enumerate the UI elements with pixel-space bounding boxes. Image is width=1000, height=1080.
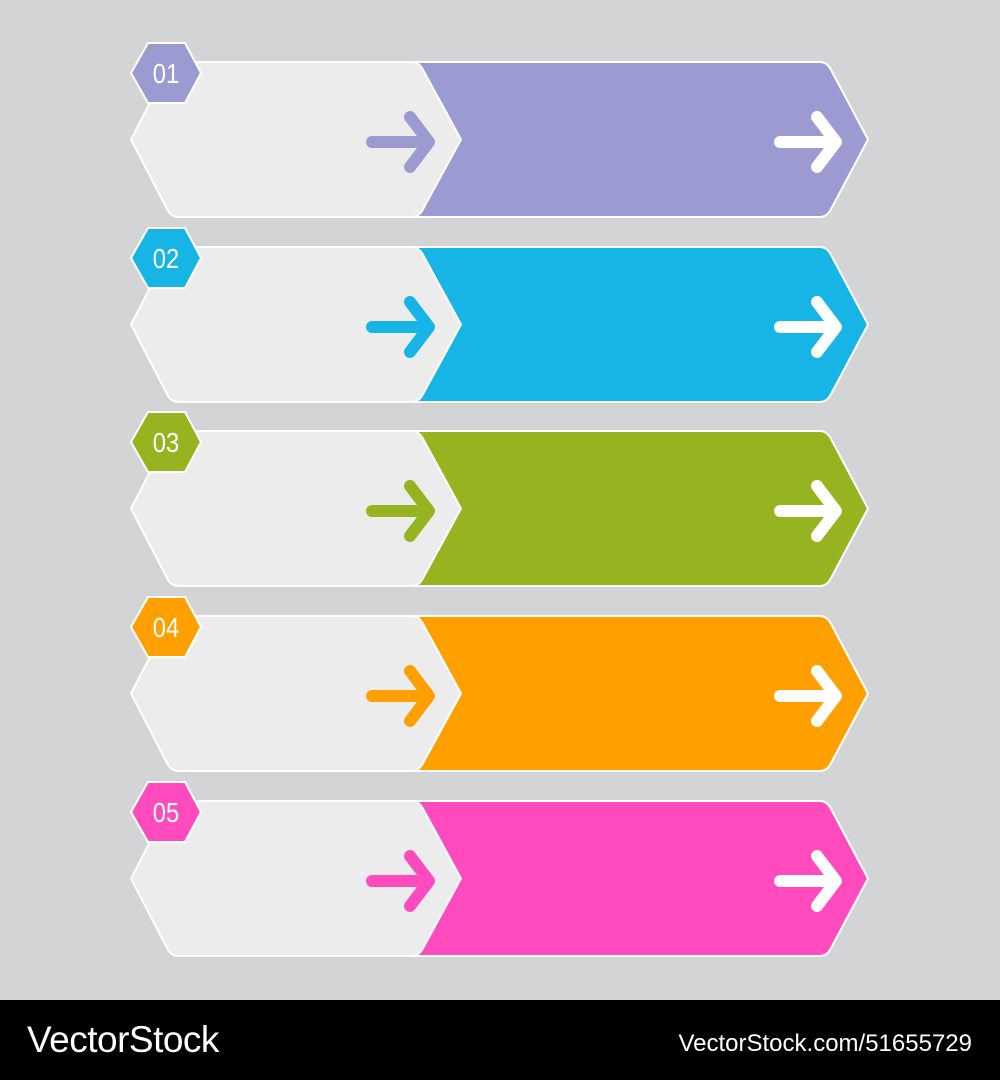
badge 03 [131, 412, 201, 472]
footer bar [0, 1000, 1000, 1080]
colored band 02 [400, 247, 868, 402]
arrow small 01 [372, 117, 429, 167]
arrow white 05 [780, 856, 836, 906]
light panel 02 [131, 247, 461, 402]
badge 04: 04 [153, 611, 179, 643]
arrow small 03 [372, 486, 429, 536]
step 02 [131, 228, 868, 402]
colored band 01 [400, 62, 868, 217]
step 03 [131, 412, 868, 586]
arrow white 02 [780, 302, 836, 352]
arrow small 02 [372, 302, 429, 352]
arrow small 05 [372, 856, 429, 906]
badge 01 [131, 43, 201, 103]
badge 02 [131, 228, 201, 288]
arrow white 01 [780, 117, 836, 167]
colored band 03 [400, 431, 868, 586]
badge 03: 03 [153, 426, 179, 458]
arrow white 04 [780, 671, 836, 721]
badge 04 [131, 597, 201, 657]
badge 05 [131, 782, 201, 842]
light panel 04 [131, 616, 461, 771]
arrow white 03 [780, 486, 836, 536]
step 01 [131, 43, 868, 217]
footer url: VectorStock.com/51655729 [678, 1030, 972, 1057]
light panel 03 [131, 431, 461, 586]
light panel 01 [131, 62, 461, 217]
badge 05: 05 [153, 796, 179, 828]
light panel 05 [131, 801, 461, 956]
arrow small 04 [372, 671, 429, 721]
footer logo: VectorStock [27, 1019, 220, 1060]
step 05 [131, 782, 868, 956]
badge 02: 02 [153, 242, 179, 274]
step 04 [131, 597, 868, 771]
badge 01: 01 [153, 57, 179, 89]
colored band 04 [400, 616, 868, 771]
colored band 05 [400, 801, 868, 956]
